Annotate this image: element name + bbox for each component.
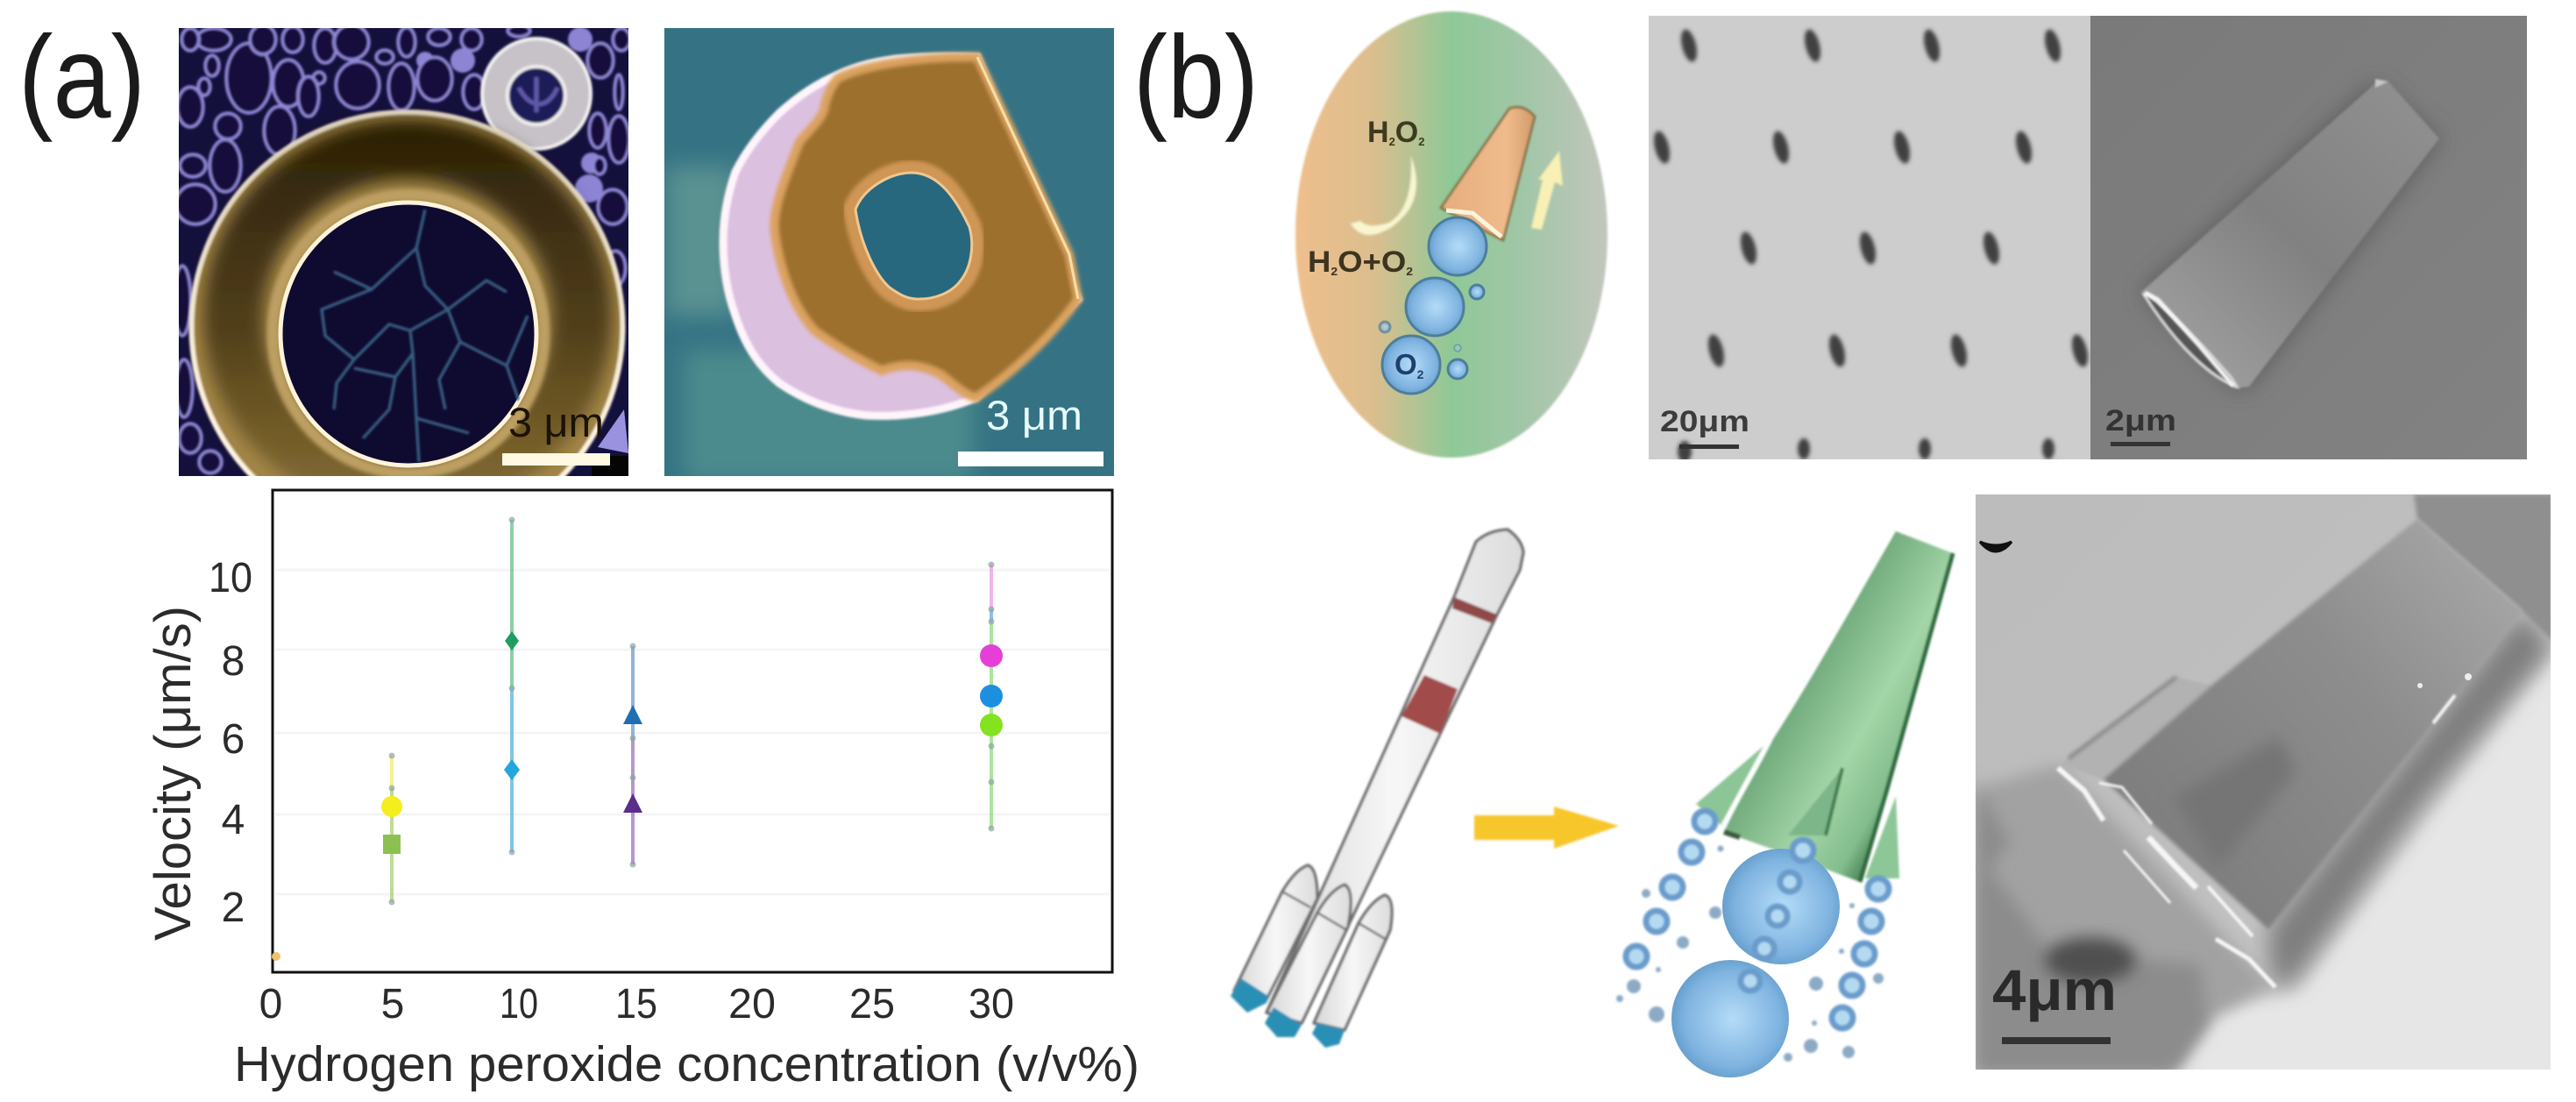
- panel: SEM ring micromotor on mesh: [179, 28, 628, 476]
- disc crescent: [723, 56, 1078, 416]
- scale bar: [502, 453, 610, 466]
- mesh seen through hole: [322, 210, 528, 462]
- illustration: rocket: [1231, 530, 1523, 1048]
- disc orange coating: [774, 57, 1078, 398]
- y tick labels: [209, 555, 252, 931]
- purple mesh corner: [598, 409, 628, 453]
- tiny bubbles: [1616, 845, 1884, 1062]
- label: (a): (a): [18, 12, 145, 143]
- mesh cells: [174, 25, 630, 473]
- y tick labels: 6: [222, 716, 245, 763]
- cone body: [2141, 82, 2439, 388]
- edge highlight: [2433, 695, 2455, 723]
- bubbles: [1380, 217, 1487, 394]
- centre booster: [1265, 885, 1351, 1037]
- panel: SEM array of microtubes: [1649, 16, 2090, 462]
- large bubbles: [1722, 849, 1840, 964]
- right booster: [1312, 895, 1392, 1048]
- dark shadow: [2045, 937, 2136, 983]
- panel: SEM finned microtube: [1976, 494, 2568, 1087]
- product formula: H: [1308, 245, 1330, 279]
- upper band: [1452, 597, 1497, 623]
- scale text: 20μm: [1660, 405, 1749, 438]
- illustration: finned microtube with bubbles: [1616, 531, 1953, 1077]
- chart: velocity versus hydrogen peroxide concentration: [145, 490, 1139, 1092]
- y tick labels: 4: [222, 797, 245, 843]
- tube array: [1651, 28, 2090, 462]
- plot frame: [273, 490, 1112, 972]
- scale bar: [2111, 442, 2170, 446]
- direction arrow: [1531, 151, 1563, 230]
- bubble formula: 2: [1417, 367, 1424, 381]
- cone inner dark block: [2174, 736, 2296, 868]
- small bubbles: [1626, 811, 1889, 1028]
- y tick labels: 2: [222, 885, 245, 931]
- scale text: 4μm: [1992, 957, 2117, 1022]
- scale bar: [1679, 444, 1739, 449]
- ring body: [188, 108, 628, 476]
- product formula: O+O: [1338, 245, 1406, 279]
- corner mark: [1980, 542, 2012, 551]
- panel: SEM sliced ring micromotor: [664, 28, 1114, 482]
- darker left region: [1976, 780, 2209, 1074]
- x tick labels: 15: [615, 981, 657, 1027]
- left booster: [1231, 865, 1317, 1013]
- scale bar: [2002, 1037, 2111, 1044]
- disc hole: [855, 173, 972, 299]
- reaction arrow: [1351, 157, 1416, 235]
- error bars: [392, 520, 991, 902]
- product formula: 2: [1331, 265, 1338, 278]
- black corner: [592, 456, 628, 476]
- x tick labels: 0: [259, 981, 282, 1027]
- lower band: [1402, 675, 1458, 734]
- cone shadow: [2141, 83, 2439, 388]
- bubble formula: O: [1394, 348, 1417, 380]
- panel: propulsion schematic ellipse: [1295, 11, 1607, 458]
- panel: SEM single microtube: [2090, 16, 2527, 459]
- product formula: 2: [1406, 265, 1413, 278]
- formula labels: 2: [1418, 135, 1424, 148]
- shadow band beside cone: [2268, 611, 2551, 985]
- light substrate lower right: [2175, 649, 2551, 1070]
- cone tip highlight: [2375, 79, 2388, 88]
- rim highlight: [2145, 293, 2233, 386]
- error bar caps: [389, 517, 994, 905]
- y tick labels: 10: [209, 555, 252, 601]
- ring hole: [280, 203, 536, 466]
- formula labels: 2: [1389, 135, 1395, 148]
- scale text: 3 μm: [986, 392, 1082, 438]
- data points: [272, 631, 1003, 961]
- x axis title: Hydrogen peroxide concentration (v/v%): [234, 1036, 1139, 1092]
- x tick labels: 10: [500, 981, 538, 1027]
- base rim highlights: [2058, 768, 2275, 987]
- scale text: 3 μm: [508, 399, 604, 445]
- pale substrate patches: [666, 167, 973, 482]
- scale bar: [958, 451, 1103, 466]
- x tick labels: 5: [381, 981, 404, 1027]
- fin shaded edge: [2069, 677, 2176, 758]
- x tick labels: [259, 981, 1014, 1027]
- formula labels: O: [1395, 116, 1418, 149]
- fins and tube: [1696, 531, 1953, 882]
- rocket body: [1267, 530, 1523, 1023]
- scale text: 2μm: [2105, 404, 2176, 437]
- label: (b): (b): [1133, 12, 1259, 143]
- tube rim: [1446, 210, 1501, 237]
- x tick labels: 30: [969, 981, 1014, 1027]
- y tick labels: 8: [222, 638, 245, 685]
- specks: [2417, 673, 2472, 688]
- y axis title: Velocity (μm/s): [145, 606, 202, 941]
- corner wedge: [2414, 494, 2552, 641]
- side fin: [2060, 677, 2211, 779]
- x tick labels: 20: [728, 981, 776, 1027]
- cone body: [2104, 519, 2523, 929]
- small ring: [482, 39, 591, 149]
- orange tube: [1441, 107, 1535, 240]
- tube opening: [2144, 295, 2237, 387]
- arrow: rocket to microtube: [1474, 807, 1619, 849]
- mid grey region: [1976, 764, 2272, 1070]
- formula labels: H: [1367, 116, 1389, 149]
- x tick labels: 25: [849, 981, 895, 1027]
